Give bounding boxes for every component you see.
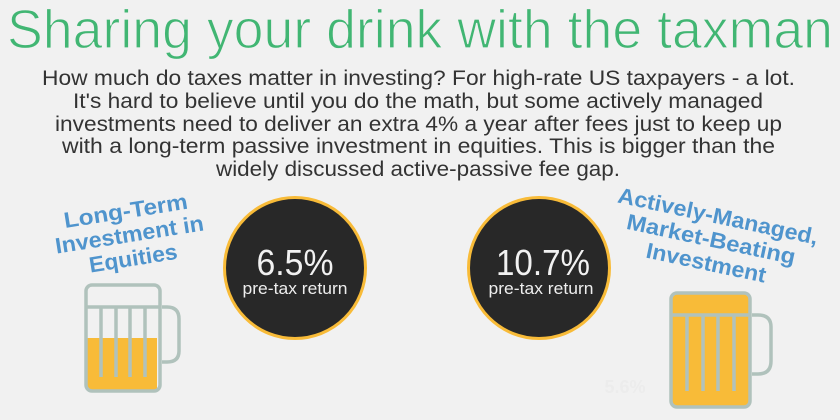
intro text block: How much do taxes matter in investing? For high-rate US taxpayers - a lot. [42, 67, 795, 90]
intro text block [42, 67, 795, 181]
right label: Actively-Managed, Market-Beating Investment: Market-Beating [624, 209, 798, 269]
right pre-tax return circle: 10.7% [496, 242, 590, 283]
intro text block: investments need to deliver an extra 4% a year after fees just to keep up [55, 113, 782, 136]
right label: Actively-Managed, Market-Beating Investment: Actively-Managed, [616, 183, 821, 250]
right label: Actively-Managed, Market-Beating Investment [606, 183, 821, 297]
left label: Long-Term Investment in Equities [50, 187, 209, 282]
right pre-tax return circle: pre-tax return [488, 279, 594, 298]
left pre-tax return circle [224, 198, 366, 338]
right label: Actively-Managed, Market-Beating Investment: Investment [644, 238, 769, 288]
intro text block: widely discussed active-passive fee gap. [215, 158, 620, 181]
left pre-tax return circle: pre-tax return [242, 279, 348, 298]
right pre-tax return circle [468, 198, 610, 338]
left pre-tax return circle: 6.5% [256, 242, 334, 283]
left label: Long-Term Investment in Equities: Investment in [53, 210, 205, 259]
left label: Long-Term Investment in Equities: Equities [87, 239, 179, 278]
icon: right beer mug, full [671, 293, 771, 407]
intro text block: It's hard to believe until you do the math, but some actively managed [73, 90, 763, 113]
intro text block: with a long-term passive investment in equities. This is bigger than the [61, 135, 775, 158]
left label: Long-Term Investment in Equities: Long-Term [62, 189, 189, 233]
icon: left beer mug, partly filled [86, 285, 179, 391]
faint ghost number: 5.6% [604, 377, 646, 397]
